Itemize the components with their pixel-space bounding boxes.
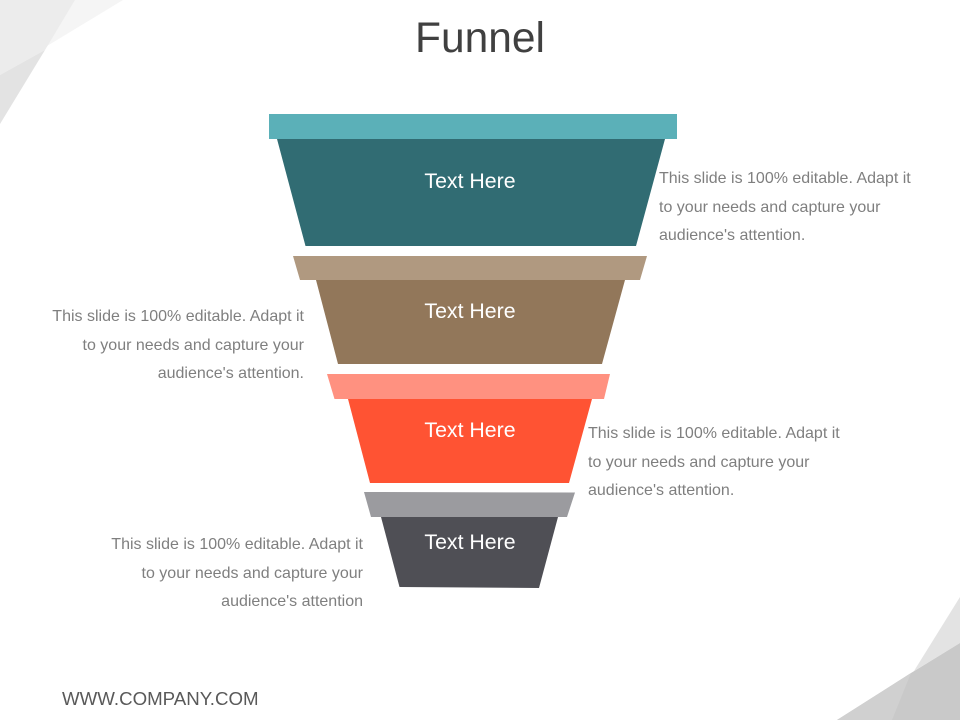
text block: tier 1 description	[659, 170, 911, 244]
label: tier 1: Text Here	[424, 169, 516, 193]
text block: tier 3 description: to your needs and capture your	[588, 454, 809, 471]
text block: tier 1 description: This slide is 100% editable. Adapt it	[659, 170, 911, 187]
tier 1: teal	[269, 114, 677, 246]
text block: tier 4 description	[111, 536, 363, 610]
label: tier 3: Text Here	[424, 418, 516, 442]
tier 4: charcoal	[364, 492, 575, 588]
text block: tier 2 description: This slide is 100% editable. Adapt it	[52, 308, 304, 325]
text block: tier 2 description: to your needs and capture your	[83, 337, 304, 354]
label: tier 4: Text Here	[424, 530, 516, 554]
text block: tier 2 description	[52, 308, 304, 382]
label: tier 2: Text Here	[424, 299, 516, 323]
text block: tier 1 description: to your needs and capture your	[659, 199, 880, 216]
title: Funnel	[415, 15, 545, 62]
text block: tier 3 description: This slide is 100% editable. Adapt it	[588, 425, 840, 442]
text block: tier 3 description	[588, 425, 840, 499]
text block: tier 4 description: This slide is 100% editable. Adapt it	[111, 536, 363, 553]
text block: tier 2 description: audience's attention.	[158, 365, 304, 382]
tier 2: brown	[293, 256, 647, 364]
tier 3: orange	[327, 374, 610, 483]
text block: tier 4 description: audience's attention	[221, 593, 363, 610]
text block: tier 1 description: audience's attention.	[659, 227, 805, 244]
text block: tier 4 description: to your needs and capture your	[142, 565, 363, 582]
text block: tier 3 description: audience's attention.	[588, 482, 734, 499]
footer: WWW.COMPANY.COM	[62, 688, 259, 709]
